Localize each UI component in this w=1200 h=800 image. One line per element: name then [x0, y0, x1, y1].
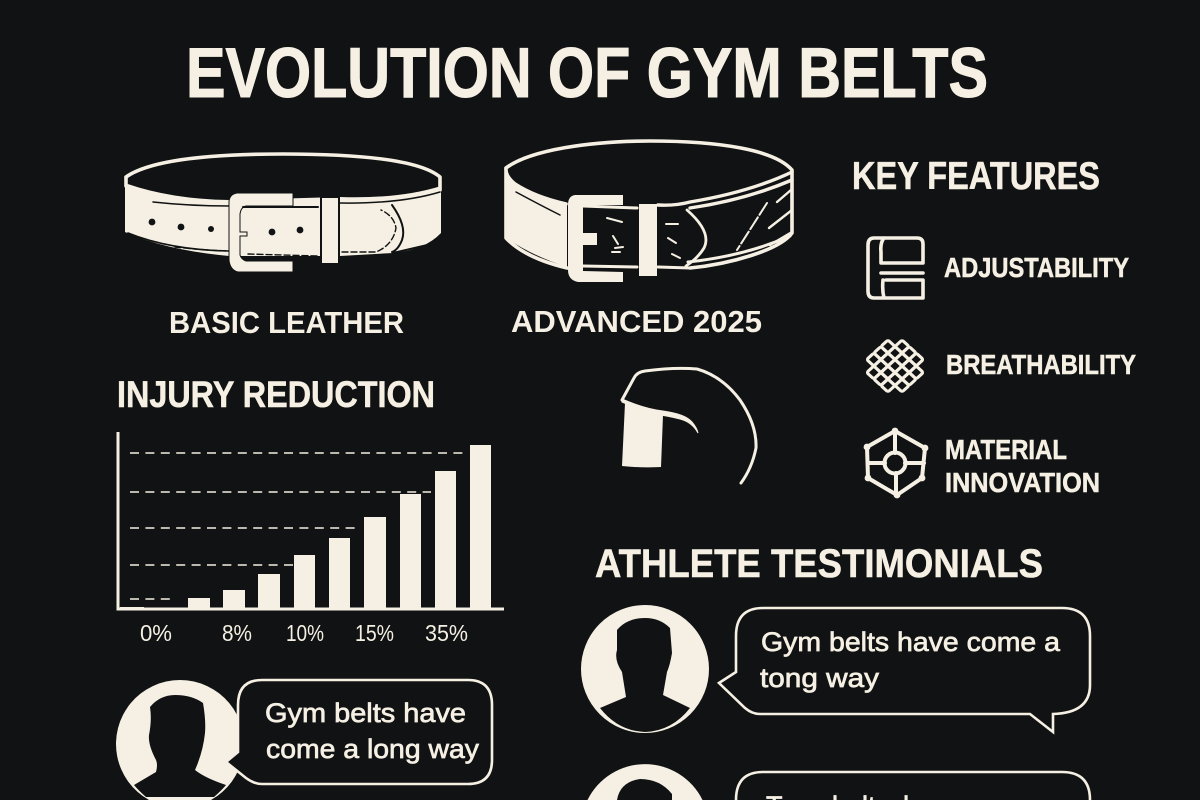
icon: breathability mesh	[860, 333, 930, 399]
axis labels: 8%	[222, 620, 252, 646]
axis labels	[140, 620, 468, 646]
avatar one	[582, 606, 708, 732]
icon: torso silhouette	[622, 368, 756, 483]
axis labels: 35%	[425, 620, 468, 646]
panel: key features	[852, 154, 1136, 498]
testimonial: bottom left	[116, 680, 492, 800]
icon: advanced belt	[505, 141, 792, 282]
panel: advanced 2025 belt	[505, 141, 792, 339]
avatar two	[588, 764, 702, 800]
belt holes	[149, 219, 303, 235]
heading: key features: KEY FEATURES	[852, 154, 1100, 197]
speech bubble two	[736, 772, 1090, 800]
label: advanced 2025: ADVANCED 2025	[511, 304, 762, 339]
avatar	[116, 680, 244, 800]
quote text: come a long way	[266, 734, 480, 764]
speech bubble one	[719, 608, 1090, 732]
bar chart	[118, 432, 504, 646]
belt keeper	[639, 204, 657, 276]
label: adjustability: ADJUSTABILITY	[944, 252, 1129, 283]
label: basic leather: BASIC LEATHER	[169, 305, 404, 340]
speech bubble	[226, 680, 492, 784]
title: EVOLUTION OF GYM BELTS	[186, 34, 988, 113]
panel: athlete testimonials	[582, 542, 1090, 800]
icon: material innovation	[864, 428, 928, 498]
axis labels: 0%	[140, 620, 172, 646]
stitching marks	[607, 218, 680, 258]
quote text two	[766, 791, 962, 800]
buckle	[568, 195, 623, 282]
icon: adjustability	[868, 238, 923, 298]
panel: injury reduction	[117, 375, 504, 646]
belt keeper	[321, 197, 339, 264]
quote text one: Gym belts have come a	[761, 627, 1061, 657]
heading: athlete testimonials: ATHLETE TESTIMONIALS	[595, 542, 1043, 586]
label: material innovation: MATERIAL	[945, 434, 1067, 465]
quote text one: tong way	[760, 663, 880, 693]
panel: basic leather belt	[125, 154, 441, 340]
label: breathability: BREATHABILITY	[946, 349, 1136, 380]
icon: basic leather belt	[125, 154, 441, 272]
label: material innovation	[945, 434, 1100, 498]
axis labels: 15%	[355, 620, 394, 646]
hatching	[737, 203, 767, 250]
heading: injury reduction: INJURY REDUCTION	[117, 375, 435, 415]
axis labels: 10%	[286, 620, 324, 646]
label: material innovation: INNOVATION	[945, 467, 1100, 498]
buckle	[229, 193, 293, 272]
quote text: Gym belts have	[265, 698, 466, 728]
